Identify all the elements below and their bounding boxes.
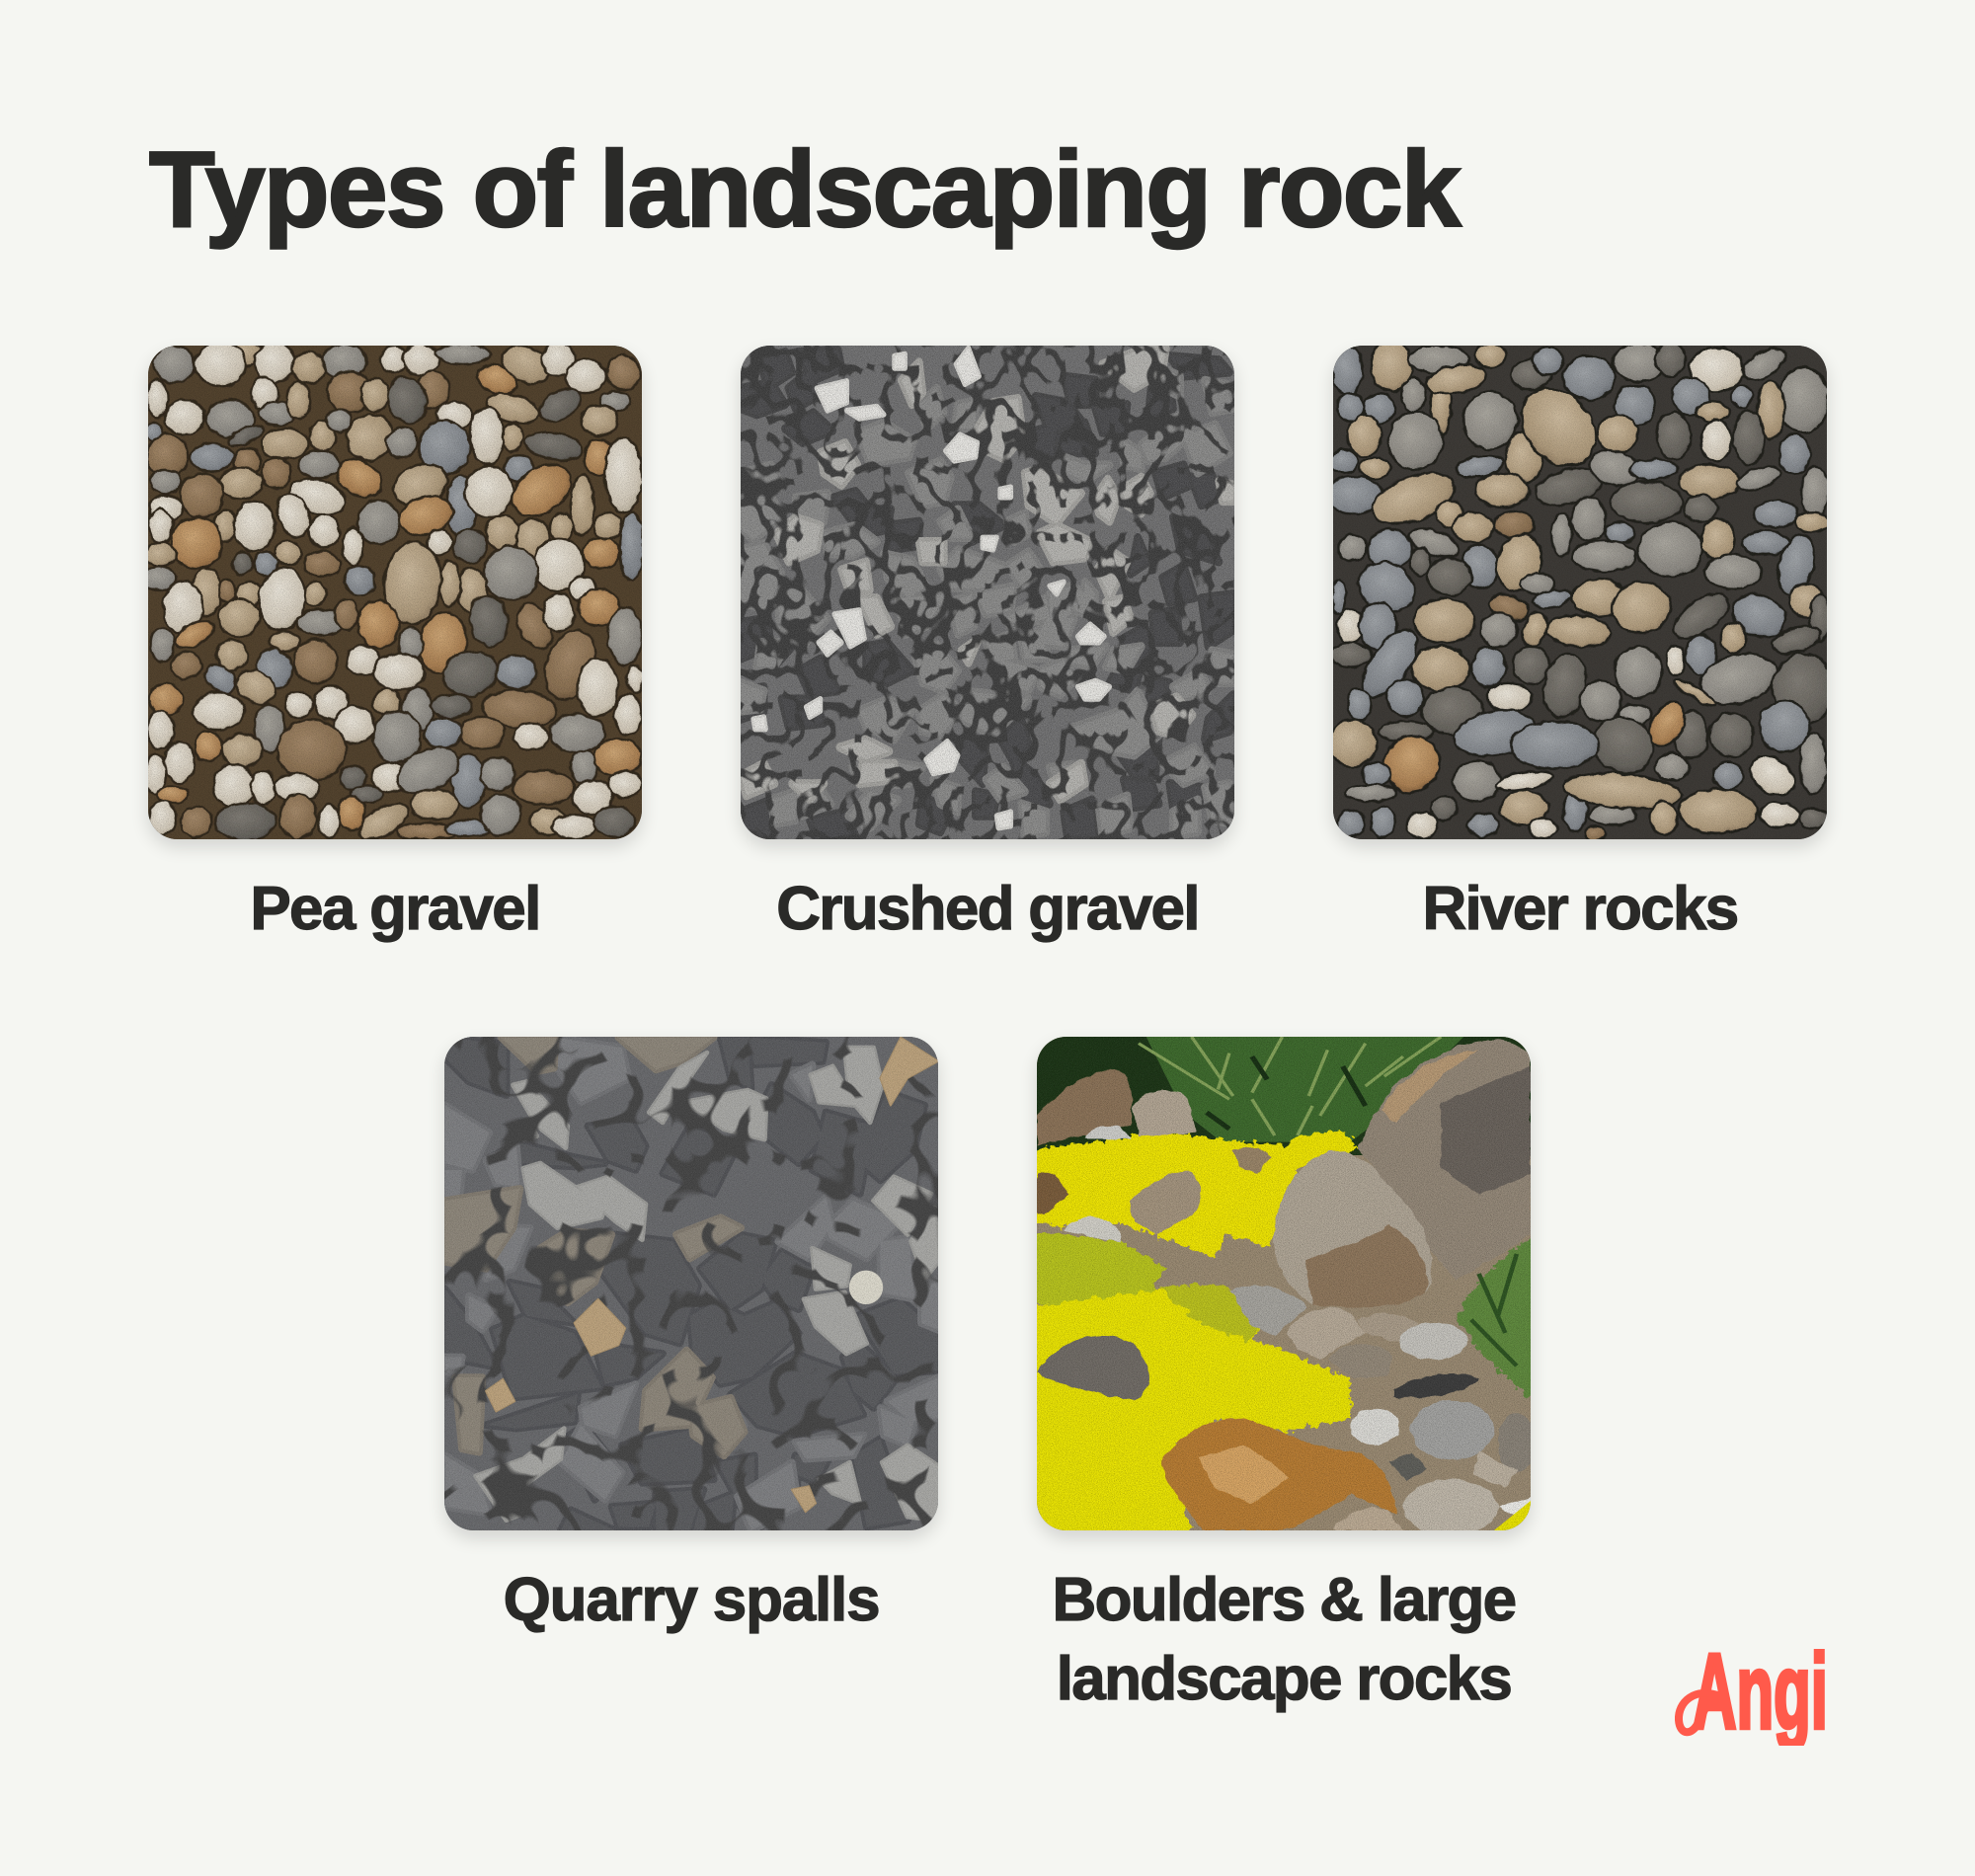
photo: river rocks [1333,346,1827,839]
label: river rocks: River rocks [1422,875,1738,943]
panel: boulders and large landscape rocks [1031,1037,1537,1713]
label: pea gravel: Pea gravel [250,875,540,943]
label: boulders and large landscape rocks [1053,1566,1516,1713]
label: boulders and large landscape rocks: landscape rocks [1057,1645,1511,1713]
photo: quarry spalls [444,1037,938,1530]
label: boulders and large landscape rocks: Boulders & large [1053,1566,1515,1634]
label: quarry spalls: Quarry spalls [504,1566,879,1634]
photo: rock garden with boulders [1037,1037,1531,1530]
label: crushed gravel: Crushed gravel [776,875,1199,943]
title: Types of landscaping rock [149,129,1460,250]
panel: crushed gravel [735,346,1240,943]
photo: pea gravel [148,346,642,839]
photo: crushed gravel [741,346,1234,839]
panel: pea gravel [142,346,648,943]
panel: quarry spalls [438,1037,944,1634]
panel: river rocks [1327,346,1833,943]
